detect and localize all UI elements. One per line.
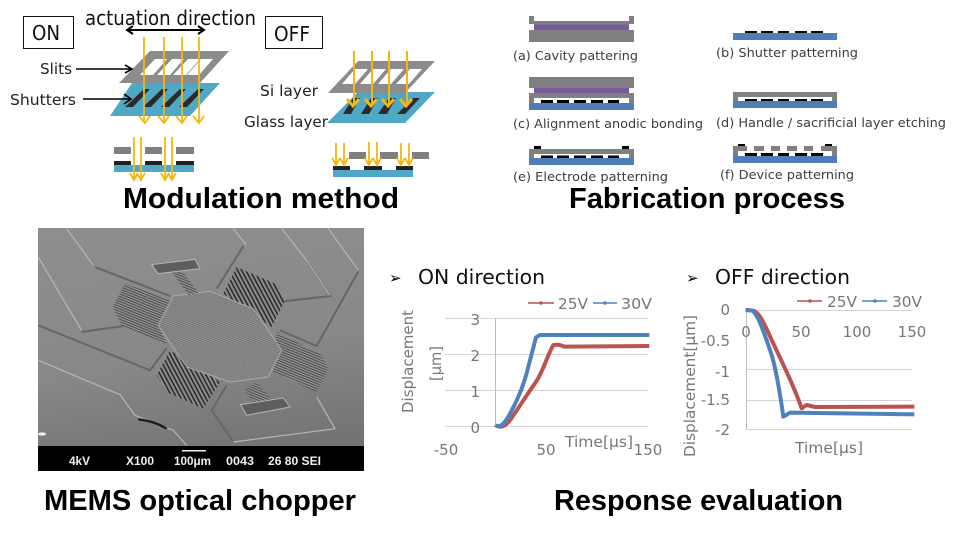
ON y axis labels: 3 [470,311,480,329]
step b: shutter patterning [716,31,858,60]
heading: Modulation method: Modulation method [123,183,399,215]
ON curves [495,335,649,427]
OFF y axis labels: -1.5 [701,391,730,409]
Slits label with arrow: Slits [40,60,72,78]
OFF y axis labels: 0 [720,301,730,319]
OFF y axis labels: -2 [715,421,730,439]
Glass layer label: Glass layer [244,113,329,131]
ON cross section [114,137,194,180]
heading: Fabrication process: Fabrication process [569,183,845,215]
Si layer label: Si layer [260,82,319,100]
step e: electrode patterning [513,146,668,184]
ON direction heading: ON direction [418,265,545,289]
chart: ON direction [389,265,662,459]
ON legend: 25V [558,295,589,313]
step e: electrode patterning: (e) Electrode patterning [513,170,668,184]
ON diagram: slit frame and shutters [110,37,229,123]
ON label box: ON [32,21,60,45]
panel: response evaluation [389,265,926,517]
OFF x axis labels: 0 [741,323,751,341]
step c: alignment anodic bonding: (c) Alignment anodic bonding [513,117,703,131]
step d: handle and sacrificial layer etching: (d) Handle / sacrificial layer etching [716,116,946,130]
SEM info bar [38,446,364,471]
ON y axis labels: 2 [470,347,480,365]
panel: MEMS optical chopper SEM image [38,228,364,471]
panel: modulation method [10,6,435,215]
ON y axis labels: 0 [470,419,480,437]
SEM info bar: 4kV [69,454,90,468]
OFF label box [266,16,322,48]
OFF curves [746,310,914,417]
ON axis titles: Time[μs] [564,433,633,451]
ON y axis labels [470,311,480,437]
step d: handle and sacrificial layer etching [716,92,946,130]
OFF x axis labels [741,323,926,341]
step f: device patterning: (f) Device patterning [720,168,854,182]
ON legend: 30V [621,295,653,313]
OFF cross section [332,142,429,177]
step a: cavity pattering [513,16,638,63]
heading: Response evaluation: Response evaluation [554,485,843,517]
OFF legend: 25V [827,293,858,311]
OFF x axis labels: 100 [843,323,871,341]
step f: device patterning [720,144,854,182]
SEM info bar: 100μm [174,454,211,468]
OFF axis titles [681,315,863,457]
OFF y axis labels: -0.5 [701,332,730,350]
OFF y axis labels: -1 [715,363,730,381]
step a: cavity pattering: (a) Cavity pattering [513,49,638,63]
ON axis titles: [μm] [427,346,445,381]
SEM info bar: X100 [126,454,154,468]
SEM device structure [38,229,358,445]
OFF legend [797,293,923,311]
ON x axis labels: 50 [536,441,556,459]
OFF direction heading: OFF direction [715,265,850,289]
ON y axis labels: 1 [470,383,480,401]
OFF axis titles: Displacement[μm] [681,315,699,457]
OFF y axis labels [701,301,730,439]
ON legend [528,295,653,313]
step c: alignment anodic bonding [513,77,703,131]
ON axis titles [399,310,633,451]
OFF x axis labels: 150 [898,323,926,341]
chart: OFF direction [681,265,926,457]
SEM info bar: 26 80 SEI [268,454,321,468]
ON x axis labels [434,441,662,459]
OFF label box: OFF [274,22,310,46]
OFF axis titles: Time[μs] [794,439,863,457]
heading: MEMS optical chopper: MEMS optical chopper [44,485,356,517]
actuation direction label: actuation direction [85,6,256,30]
ON x axis labels: 150 [634,441,662,459]
ON label box [24,16,74,48]
step b: shutter patterning: (b) Shutter patterning [716,46,858,60]
OFF direction heading: ➢ [686,269,699,287]
ON x axis labels: -50 [434,441,458,459]
ON axis titles: Displacement [399,310,417,413]
Slits label with arrow [40,60,132,78]
Shutters label with arrow [10,91,131,109]
OFF x axis labels: 50 [791,323,811,341]
SEM info bar: 0043 [226,454,254,468]
ON direction heading: ➢ [389,269,402,287]
Shutters label with arrow: Shutters [10,91,76,109]
OFF diagram: Si layer and glass layer [327,51,435,123]
actuation direction double arrow [127,26,204,34]
panel: fabrication process [513,16,946,215]
OFF legend: 30V [892,293,923,311]
